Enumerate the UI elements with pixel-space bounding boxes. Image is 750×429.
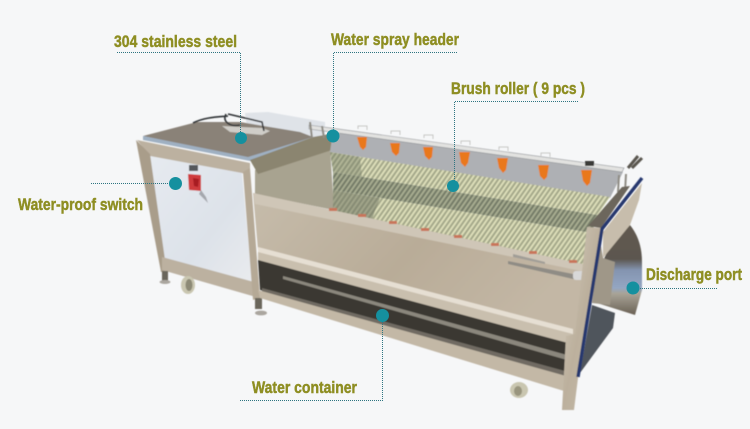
blue edge strip bbox=[578, 178, 642, 377]
leader line: 304 stainless steel bbox=[117, 52, 240, 132]
chute left wall bbox=[592, 240, 615, 305]
water spray header bbox=[309, 122, 642, 192]
label: water spray header: Water spray header bbox=[331, 31, 459, 49]
dark lower opening bbox=[258, 260, 568, 376]
leader line: brush roller bbox=[454, 102, 578, 182]
right post bbox=[562, 227, 601, 410]
waterproof switch box bbox=[188, 165, 208, 203]
brush rollers bbox=[330, 152, 610, 268]
marker dot: brush roller bbox=[447, 180, 459, 192]
leader line: water container bbox=[240, 320, 382, 400]
marker dot: water spray header bbox=[326, 130, 340, 142]
discharge chute bbox=[597, 225, 642, 315]
front caster bbox=[510, 382, 528, 398]
orange spray nozzles bbox=[357, 137, 592, 186]
washing machine photo bbox=[136, 112, 642, 410]
leader line: water spray header bbox=[334, 52, 457, 130]
front wash tank panel bbox=[253, 193, 587, 344]
label: brush roller: Brush roller ( 9 pcs ) bbox=[451, 80, 585, 98]
back lid panel bbox=[245, 112, 325, 150]
marker dot: discharge port bbox=[626, 282, 640, 294]
side frame top flap bbox=[588, 186, 630, 228]
label: water-proof switch: Water-proof switch bbox=[18, 196, 143, 214]
leader line: discharge port bbox=[638, 288, 718, 290]
label: water container: Water container bbox=[252, 379, 357, 397]
marker dot: water container bbox=[376, 309, 389, 322]
lower beam bbox=[258, 290, 566, 391]
back plate behind spray header bbox=[330, 130, 623, 198]
control cabinet lid bbox=[143, 114, 313, 161]
cabinet feet and caster bbox=[160, 271, 267, 315]
lid underside bbox=[250, 133, 335, 174]
dark base under chute bbox=[580, 305, 615, 373]
inner wall of washing tank bbox=[255, 147, 334, 210]
leader line: water-proof switch bbox=[91, 182, 170, 184]
marker dot: water-proof switch bbox=[169, 177, 182, 190]
marker dot: 304 stainless steel bbox=[235, 132, 247, 144]
side panel bbox=[603, 183, 642, 258]
label: 304 stainless steel: 304 stainless steel bbox=[114, 33, 237, 51]
control cabinet frame bbox=[136, 140, 260, 300]
